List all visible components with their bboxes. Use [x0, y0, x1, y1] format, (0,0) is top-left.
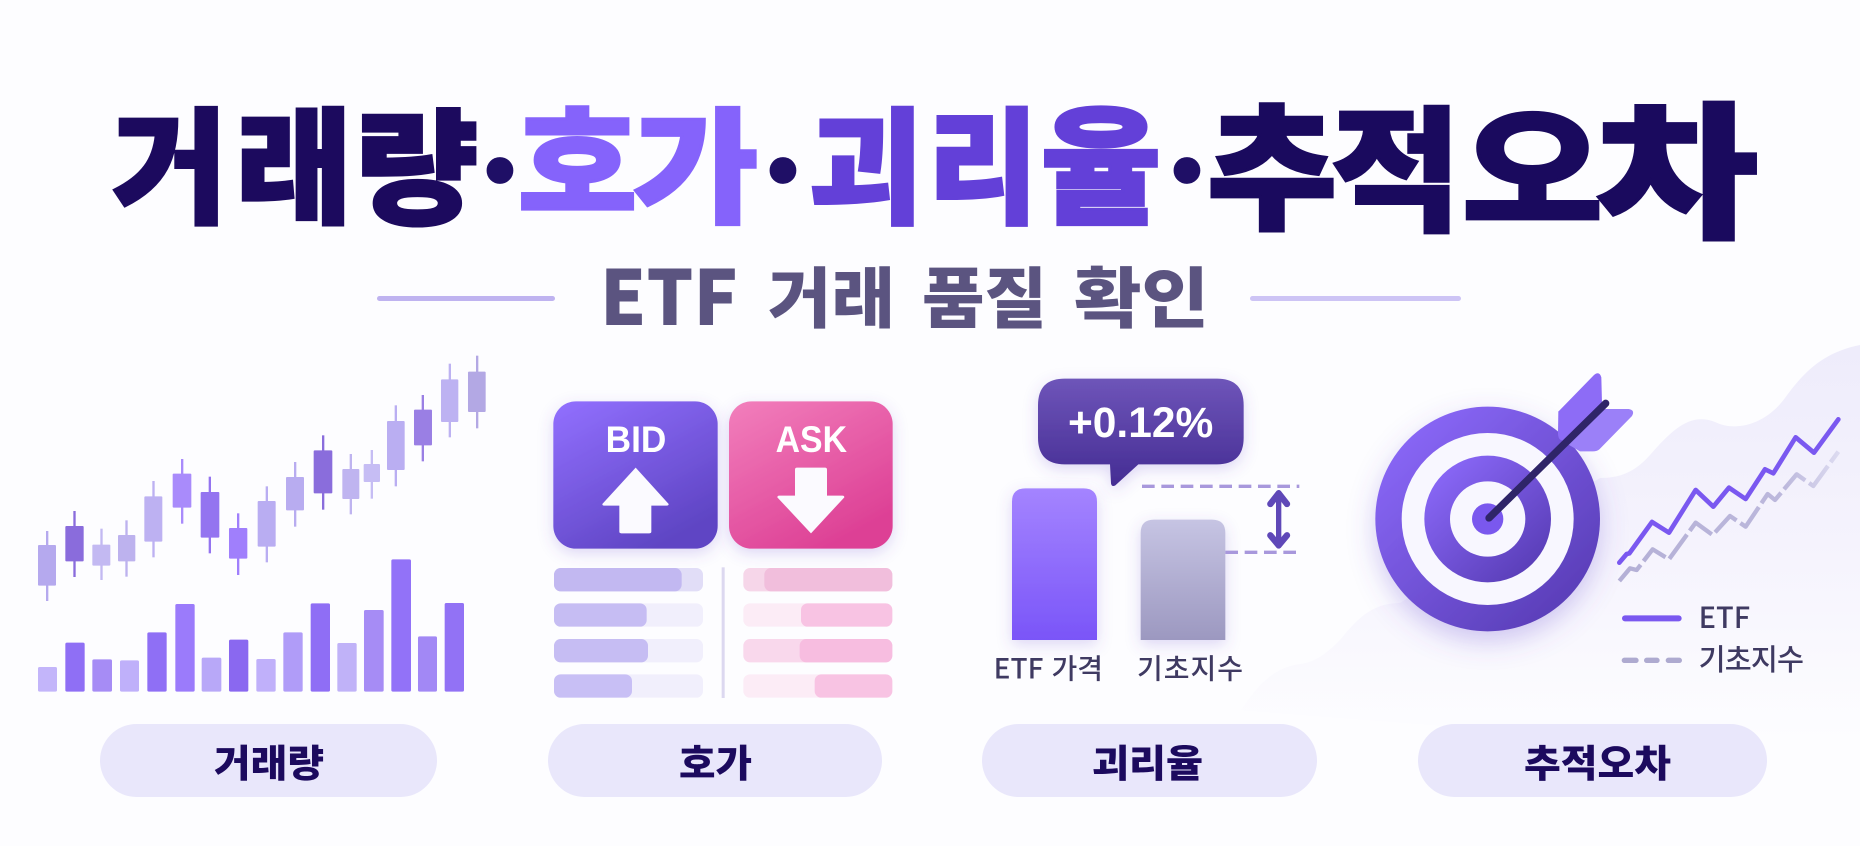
- subtitle text: 확인: [1074, 246, 1209, 342]
- BID button: [553, 401, 718, 549]
- title word: 추적오차: 차: [1596, 56, 1758, 269]
- ETF price bar: [1012, 488, 1097, 640]
- subtitle text: [600, 237, 1209, 347]
- legend: ETF: ETF: [1699, 595, 1750, 637]
- title word: 호가: 가: [633, 68, 758, 249]
- title separator dot: ·: [1159, 78, 1215, 261]
- title word: 거래량: 래: [236, 68, 352, 249]
- legend: index: 기초지수: [1699, 637, 1804, 679]
- pill label: 거래량: 거래량: [214, 733, 324, 788]
- pill label: 추적오차: 추적오차: [1524, 733, 1671, 788]
- subtitle text: ETF: [600, 237, 738, 347]
- title word: 추적오차: 적: [1331, 63, 1461, 259]
- candlestick chart: [38, 356, 486, 601]
- arrow fletching: upper vane: [1558, 373, 1602, 442]
- pill label: 호가: [548, 724, 882, 797]
- bar label: ETF price: ETF 가격: [994, 647, 1103, 687]
- icon: down arrow: [777, 468, 844, 533]
- bar label: index: 기초지수: [1137, 647, 1243, 687]
- bid order book depth bars: [554, 568, 703, 698]
- index bar: [1141, 520, 1225, 640]
- title separator dot: ·: [755, 78, 811, 261]
- icon: up arrow: [602, 468, 669, 533]
- legend: [1624, 595, 1804, 679]
- arrow shaft: [1489, 403, 1606, 518]
- title: [112, 56, 1758, 269]
- title word: 괴리율: 율: [1041, 66, 1161, 250]
- title word: 추적오차: 추: [1207, 61, 1337, 258]
- subtitle text: 거래: [768, 246, 895, 342]
- arrow fletching: lower vane: [1563, 409, 1633, 451]
- panel: bid ask: [553, 401, 893, 698]
- title word: 호가: [518, 68, 758, 249]
- gap dashed guides: [1142, 486, 1299, 552]
- title word: 호가: 호: [518, 68, 637, 243]
- subtitle: [377, 237, 1461, 347]
- ASK button: ASK: [776, 418, 847, 460]
- subtitle text: 품질: [922, 246, 1047, 342]
- line chart: ETF: [1619, 419, 1838, 563]
- pill label: 괴리율: [982, 724, 1317, 797]
- title word: 추적오차: [1207, 56, 1758, 269]
- legend: ETF: [1625, 595, 1750, 637]
- icon: target with arrow: [1375, 373, 1633, 631]
- pill label: 괴리율: 괴리율: [1092, 733, 1203, 788]
- arrow: gap: [1270, 493, 1287, 546]
- title word: 괴리율: 리: [928, 68, 1038, 249]
- ask order book depth bars: [743, 568, 892, 698]
- BID button: BID: [606, 418, 666, 460]
- title separator dot: ·: [472, 78, 528, 261]
- subtitle left rule: [377, 296, 555, 301]
- volume bars: [38, 559, 464, 692]
- line chart: index: [1619, 452, 1838, 581]
- background wave: [1241, 345, 1860, 760]
- subtitle right rule: [1250, 296, 1461, 301]
- ASK button: [729, 401, 893, 549]
- title word: 거래량: 량: [355, 69, 478, 250]
- order book divider: [722, 567, 725, 698]
- title word: 괴리율: [809, 66, 1161, 250]
- callout: +0.12%: [1038, 379, 1244, 486]
- panel: premium discount: [994, 379, 1299, 687]
- title word: 괴리율: 괴: [809, 68, 922, 249]
- panel: tracking error: [1375, 373, 1838, 679]
- pill label: 호가: 호가: [679, 733, 752, 788]
- pill label: 추적오차: [1418, 724, 1767, 797]
- title word: 거래량: 거: [112, 68, 228, 249]
- pill label: 거래량: [100, 724, 437, 797]
- title word: 추적오차: 오: [1462, 65, 1603, 259]
- panel: volume: [38, 356, 486, 692]
- title word: 거래량: [112, 68, 478, 250]
- callout: +0.12%: +0.12%: [1068, 399, 1213, 447]
